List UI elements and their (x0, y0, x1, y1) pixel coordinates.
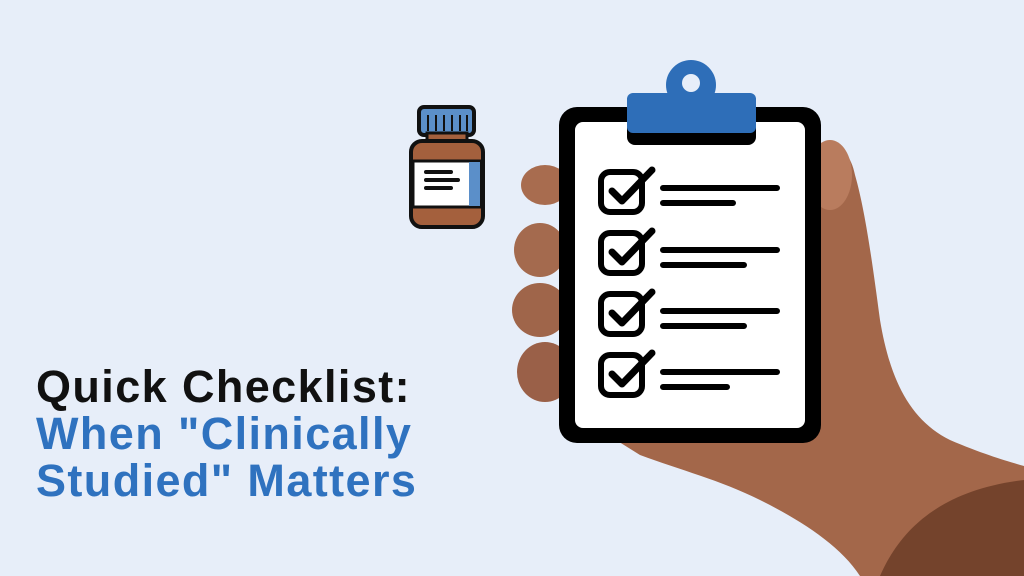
icon: hand (512, 140, 1024, 576)
title (36, 361, 417, 506)
icon: medicine bottle (411, 107, 483, 227)
icon: clipboard (559, 60, 821, 443)
title: Quick Checklist: (36, 361, 411, 412)
checklist items (601, 170, 777, 395)
title: When "Clinically (36, 408, 412, 459)
title: Studied" Matters (36, 455, 417, 506)
